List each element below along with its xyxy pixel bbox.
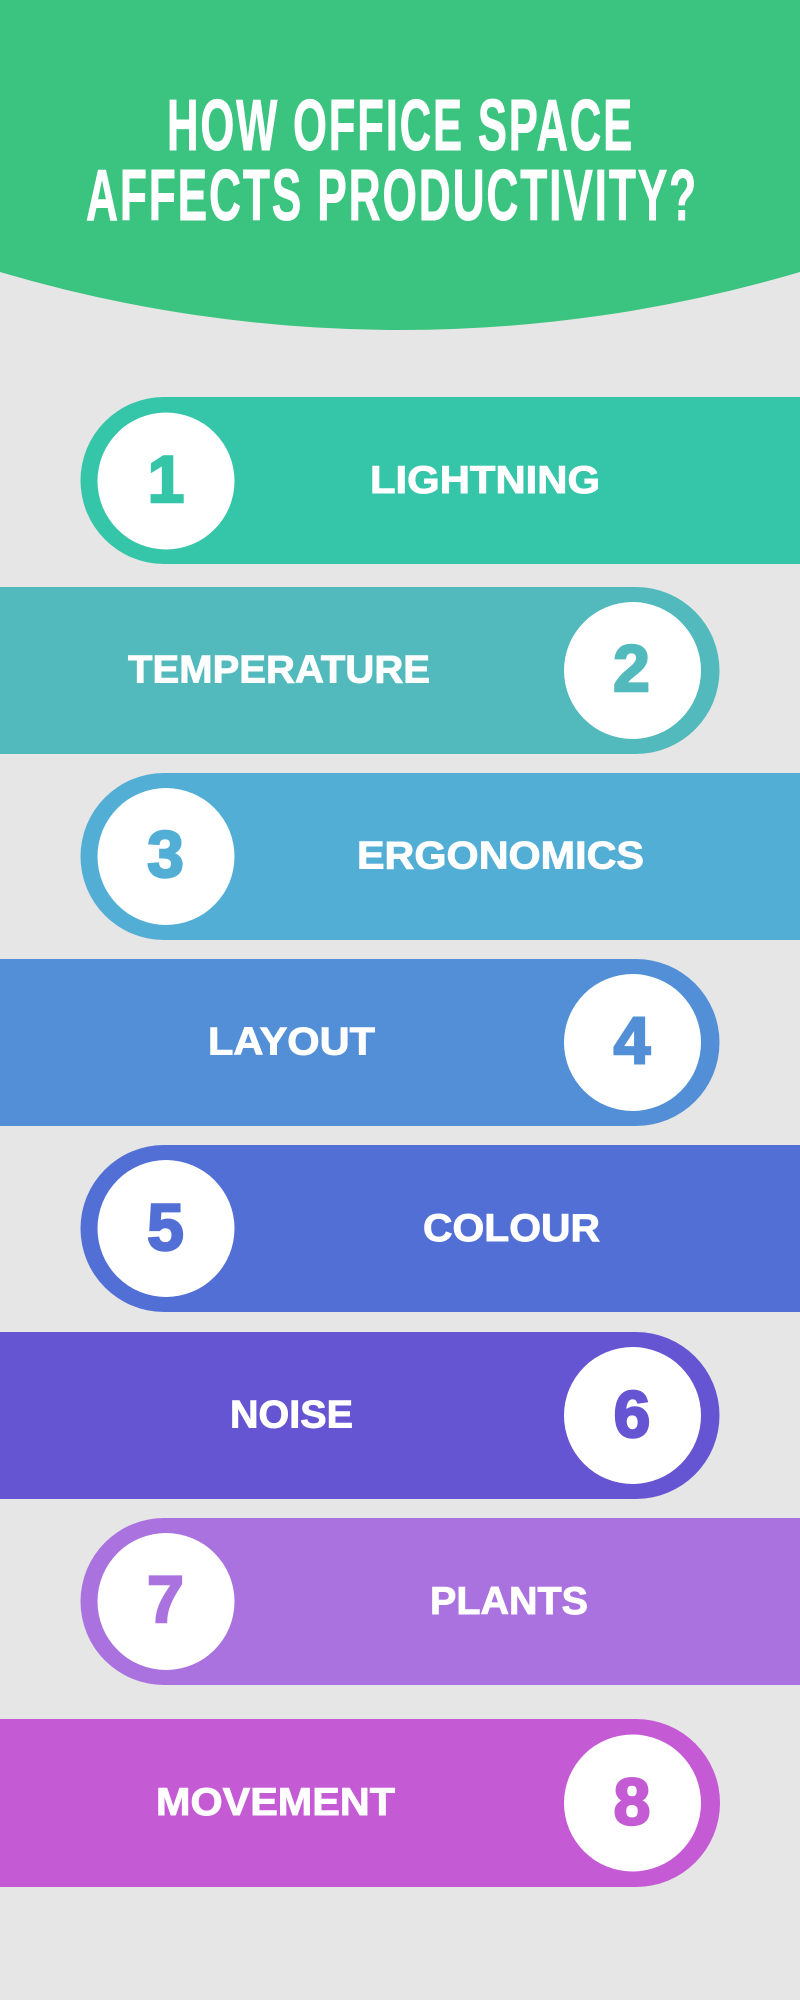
- number badge 8: [564, 1734, 701, 1872]
- label: movement: MOVEMENT: [156, 1781, 396, 1824]
- number badge 2: [564, 602, 701, 739]
- panel: 7 plants: [81, 1518, 800, 1685]
- header panel: [0, 0, 800, 330]
- label: ergonomics: ERGONOMICS: [357, 834, 644, 878]
- number badge 7: 7: [147, 1562, 184, 1636]
- label: plants: PLANTS: [430, 1580, 588, 1623]
- number badge 6: [564, 1347, 701, 1484]
- number badge 5: [98, 1160, 234, 1297]
- label: lightning: LIGHTNING: [370, 459, 600, 502]
- panel: 6 noise: [0, 1332, 720, 1499]
- panel: 8 movement: [0, 1719, 720, 1887]
- number badge 1: [98, 412, 234, 550]
- number badge 4: 4: [614, 1003, 651, 1077]
- panel: 3 ergonomics: [81, 773, 800, 940]
- number badge 5: 5: [147, 1190, 184, 1264]
- panel: 1 lightning: [81, 397, 800, 564]
- label: colour: COLOUR: [423, 1207, 600, 1250]
- number badge 6: 6: [614, 1377, 650, 1451]
- label: layout: LAYOUT: [208, 1020, 376, 1064]
- number badge 4: [564, 974, 701, 1111]
- panel: 5 colour: [81, 1145, 800, 1312]
- number badge 8: 8: [614, 1764, 650, 1838]
- label: temperature: TEMPERATURE: [128, 648, 430, 692]
- number badge 7: [98, 1533, 234, 1670]
- number badge 2: 2: [613, 631, 650, 705]
- label: noise: NOISE: [230, 1394, 353, 1436]
- number badge 3: 3: [147, 817, 184, 891]
- panel: 2 temperature: [0, 587, 720, 754]
- panel: 4 layout: [0, 959, 720, 1126]
- number badge 1: 1: [148, 442, 184, 516]
- number badge 3: [98, 788, 234, 925]
- title: [86, 86, 698, 236]
